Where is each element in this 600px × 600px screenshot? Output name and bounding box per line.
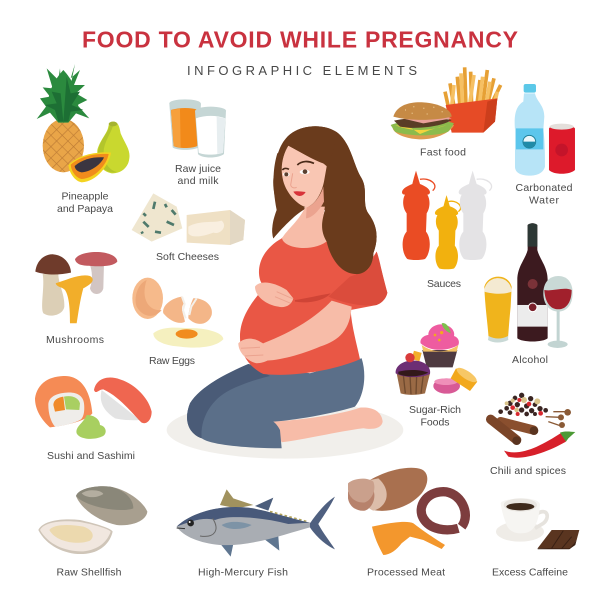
label: Sauces: Sauces [427, 278, 461, 290]
label: Pineapple and Papaya: Pineapple [62, 190, 109, 202]
lower hand [238, 339, 272, 363]
shirt [240, 213, 387, 375]
label: Raw juice and milk: and milk [178, 175, 219, 187]
panel: raw juice and milk [169, 99, 226, 187]
floor shadow [167, 401, 403, 459]
icon: loaf, slices, sausage ring and chicken leg [348, 468, 465, 555]
label: Soft Cheeses: Soft Cheeses [156, 251, 219, 263]
hair back [272, 126, 377, 274]
label: Carbonated Water: Water [529, 194, 560, 206]
illustration: seated pregnant woman [167, 126, 403, 459]
label: Sugar-Rich Foods: Foods [420, 416, 450, 428]
panel: sushi and sashimi [35, 376, 152, 462]
panel: fast food [391, 67, 501, 158]
trousers [187, 358, 364, 448]
label: Excess Caffeine: Excess Caffeine [492, 566, 568, 578]
panel: pregnant woman [167, 126, 403, 459]
label: Raw Eggs: Raw Eggs [149, 355, 195, 367]
panel: pineapple and papaya [37, 64, 130, 215]
belly shadow [295, 293, 331, 302]
left hair lock [272, 146, 306, 238]
panel: processed meat [348, 468, 465, 578]
icon: open and closed oysters [38, 486, 147, 554]
subtitle: INFOGRAPHIC ELEMENTS [187, 63, 417, 78]
panel: soft cheeses [132, 193, 245, 263]
label: Sushi and Sashimi: Sushi and Sashimi [47, 450, 135, 462]
icon: burger and fries [391, 67, 501, 139]
icon: beer, wine bottle and glass [484, 223, 573, 348]
icon: coffee cup and chocolate [496, 498, 579, 549]
icon: sushi roll, sashimi and wasabi [35, 376, 152, 439]
hair front [322, 133, 377, 274]
icon: whole egg, broken shell and yolk [132, 278, 223, 348]
icon: three mushrooms [35, 252, 117, 323]
panel: raw eggs [132, 278, 223, 367]
icon: squeeze bottles [402, 171, 492, 269]
icon: water bottle and soda can [515, 84, 575, 176]
panel: sugar-rich foods [396, 323, 479, 428]
arm [260, 301, 352, 361]
panel: excess caffeine [492, 498, 579, 578]
label: Carbonated Water: Carbonated [516, 182, 573, 194]
icon: pineapple, pear and papaya [37, 64, 130, 182]
panel: high-mercury fish [177, 489, 335, 578]
icon: blue cheese wedge and white cheese [132, 193, 245, 245]
label: Processed Meat: Processed Meat [367, 566, 445, 578]
icon: peppercorns, cinnamon, cloves and chili [491, 393, 575, 458]
icon: glasses of juice and milk [169, 99, 226, 157]
label: Alcohol: Alcohol [512, 354, 548, 366]
panel: chili and spices [490, 393, 575, 477]
chest and neck [282, 207, 328, 248]
panel: raw shellfish [38, 486, 147, 578]
sleeve ruffle [328, 252, 387, 306]
title: FOOD TO AVOID WHILE PREGNANCY [82, 26, 518, 52]
panel: alcohol [484, 223, 573, 366]
lower leg and foot [273, 408, 383, 442]
label: High-Mercury Fish: High-Mercury Fish [198, 566, 288, 578]
label: Sugar-Rich Foods: Sugar-Rich [409, 404, 461, 416]
panel: mushrooms [35, 252, 117, 346]
panel: carbonated water [515, 84, 575, 206]
face [281, 146, 329, 207]
label: Pineapple and Papaya: and Papaya [57, 203, 113, 215]
icon: tuna [177, 489, 335, 557]
panel: sauces [402, 171, 492, 290]
upper hand [255, 283, 293, 307]
label: Raw juice and milk: Raw juice [175, 163, 221, 175]
label: Mushrooms: Mushrooms [46, 334, 104, 346]
label: Fast food: Fast food [420, 146, 466, 158]
label: Chili and spices: Chili and spices [490, 465, 566, 477]
icon: cupcakes and candies [396, 323, 479, 395]
label: Raw Shellfish: Raw Shellfish [56, 566, 122, 578]
